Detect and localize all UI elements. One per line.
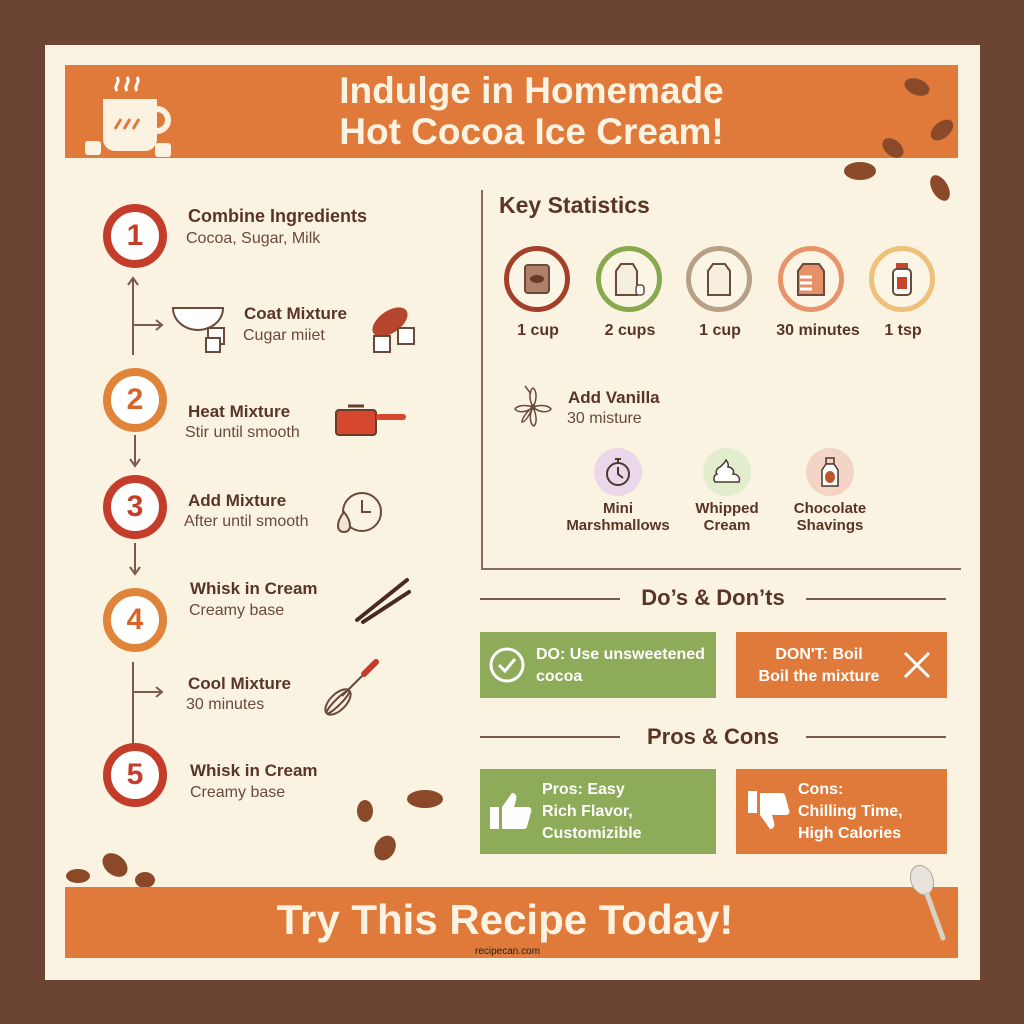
step 3: 3 [127, 490, 143, 523]
step 5 [103, 743, 167, 807]
title: Indulge in Homemade [339, 70, 724, 111]
topping: chocolate shavings [806, 448, 854, 496]
icon: X [904, 652, 930, 678]
header banner [65, 65, 958, 158]
footer url: recipecan.com [475, 946, 540, 957]
step 4 [103, 588, 167, 652]
callout: cons [736, 769, 947, 854]
icon: cocoa beans top right [844, 78, 954, 201]
stat: vanilla bottle [869, 246, 935, 312]
steps column: Cugar miiet [243, 327, 325, 344]
panel: key statistics: 30 misture [567, 410, 642, 427]
steps column [103, 204, 415, 807]
panel: key statistics: 1 tsp [884, 322, 922, 339]
heading: Key Statistics [499, 192, 650, 218]
step 1 [103, 204, 167, 268]
icon: scattered beans left [66, 790, 443, 887]
callout: DON'T: Boil the mixture [759, 668, 879, 685]
callout: pros: Customizible [542, 825, 642, 842]
title: Hot Cocoa Ice Cream! [339, 111, 724, 152]
icon: cocoa mug [85, 76, 171, 157]
icon: whisk [324, 659, 379, 716]
steps column: Whisk in Cream [190, 761, 318, 780]
steps column: Add Mixture [188, 491, 286, 510]
icon: cocoa pod [372, 307, 415, 353]
arrow branch 4-5 [132, 662, 164, 744]
panel: key statistics: 1 cup [699, 322, 741, 339]
steps column: Cocoa, Sugar, Milk [186, 230, 320, 247]
panel: key statistics: 2 cups [605, 322, 655, 339]
footer banner: Try This Recipe Today! [277, 896, 733, 943]
stat: cocoa [504, 246, 570, 312]
icon: check [490, 648, 524, 682]
panel: key statistics: Cream [704, 517, 750, 534]
steps column: Whisk in Cream [190, 579, 318, 598]
panel: key statistics: Shavings [797, 517, 863, 534]
step 2 [103, 368, 167, 432]
stat: milk [596, 246, 662, 312]
step 2: 2 [127, 383, 143, 416]
icon: vanilla pods [354, 578, 412, 624]
stat: time carton [778, 246, 844, 312]
callout: DO [480, 632, 716, 698]
callout: pros: Pros: Easy [542, 781, 625, 798]
icon: bowl with sugar [172, 307, 225, 353]
steps column: Creamy base [189, 602, 284, 619]
panel: key statistics: Mini [603, 500, 633, 517]
steps column: 30 minutes [186, 696, 264, 713]
steps column: Creamy base [190, 784, 285, 801]
icon: vanilla flower [514, 386, 552, 427]
step 4: 4 [127, 603, 143, 636]
heading: do's and don'ts: Do’s & Don’ts [641, 585, 785, 610]
panel: key statistics: Add Vanilla [568, 388, 660, 407]
callout: pros: Rich Flavor, [542, 803, 633, 820]
step 1: 1 [127, 219, 143, 252]
steps column: Heat Mixture [188, 402, 290, 421]
heading: pros and cons: Pros & Cons [647, 724, 779, 749]
icon: clock with drop [337, 492, 382, 533]
step 5: 5 [127, 758, 143, 791]
stat: cream [686, 246, 752, 312]
steps column: After until smooth [184, 513, 308, 530]
steps column: Combine Ingredients [188, 206, 367, 226]
panel: key statistics: Chocolate [794, 500, 866, 517]
panel: key statistics: 30 minutes [776, 322, 860, 339]
icon: saucepan [335, 404, 406, 436]
panel: key statistics: 1 cup [517, 322, 559, 339]
callout: pros [480, 769, 716, 854]
callout: DON'T: DON'T: Boil [775, 646, 863, 663]
panel: key statistics: Marshmallows [566, 517, 670, 534]
callout: cons: High Calories [798, 825, 901, 842]
steps column: Stir until smooth [185, 424, 300, 441]
arrow 3-4 [129, 543, 141, 576]
arrow: branch 1 [127, 276, 164, 355]
topping: marshmallows [594, 448, 642, 496]
footer banner [65, 887, 958, 958]
title [339, 70, 724, 152]
steps column: Cool Mixture [188, 674, 291, 693]
callout: DO: DO: Use unsweetened [536, 646, 705, 663]
icon: spoon [910, 864, 946, 940]
icon: thumbs up [490, 793, 532, 829]
steps column: Coat Mixture [244, 304, 347, 323]
callout: DON'T [736, 632, 947, 698]
panel: key statistics: Whipped [695, 500, 759, 517]
topping: whipped cream [703, 448, 751, 496]
step 3 [103, 475, 167, 539]
callout: cons: Chilling Time, [798, 803, 903, 820]
panel: key statistics [481, 190, 961, 570]
icon: thumbs down [748, 791, 790, 829]
callout: DO: cocoa [536, 668, 582, 685]
callout: cons: Cons: [798, 781, 843, 798]
arrow 2-3 [129, 435, 141, 468]
